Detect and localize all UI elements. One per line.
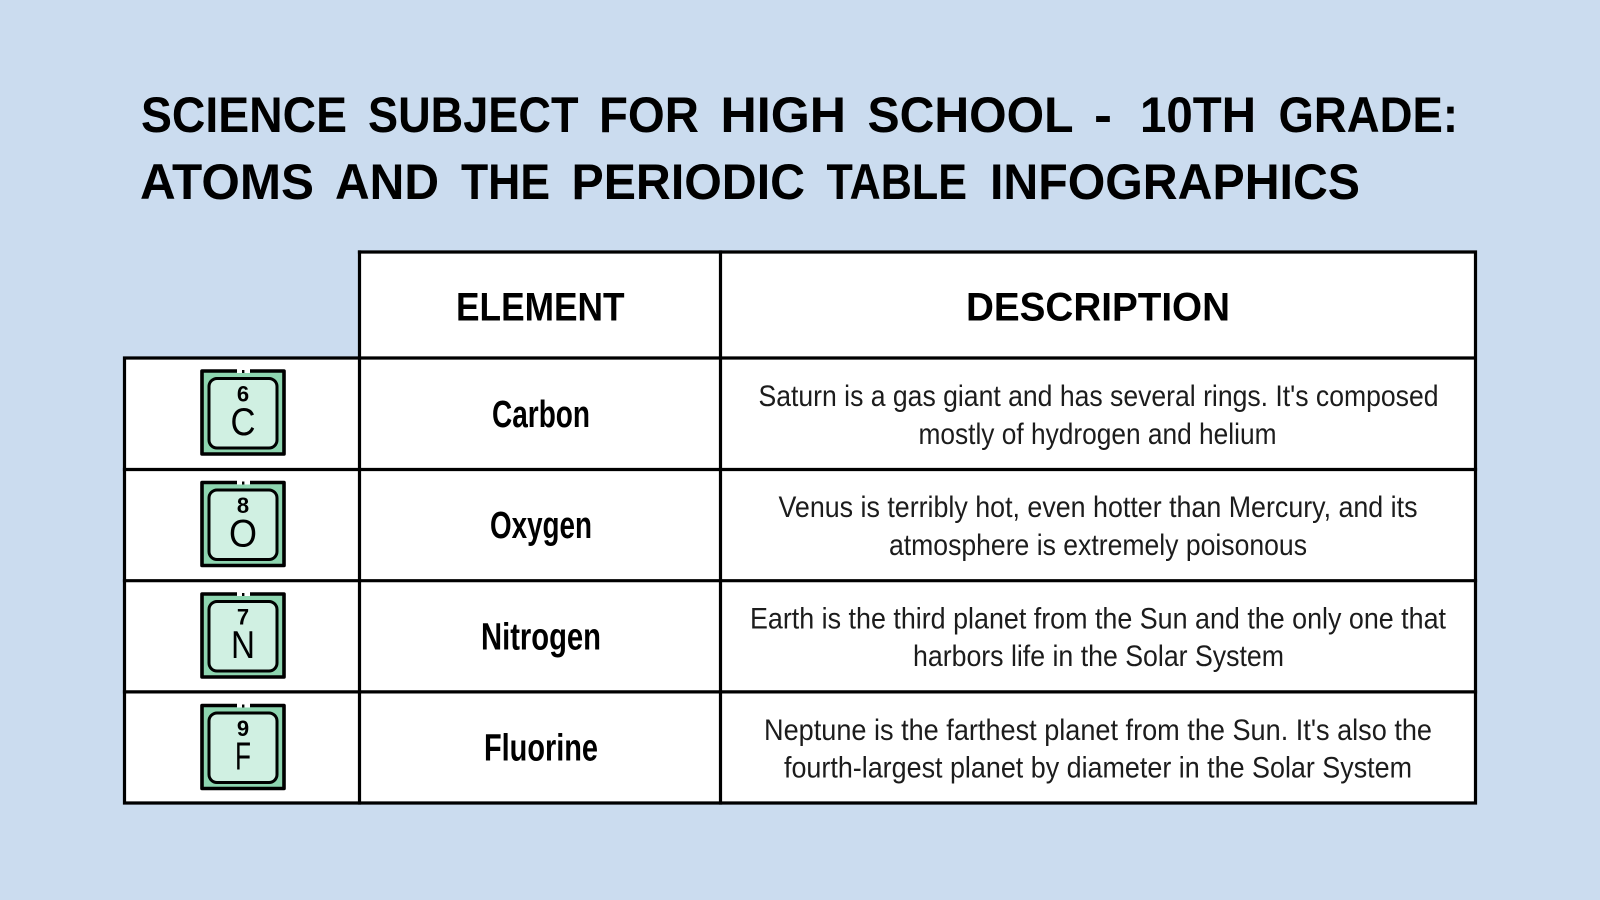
icon: oxygen tile: O bbox=[229, 512, 257, 556]
title: PERIODIC bbox=[572, 154, 805, 210]
title: SCHOOL bbox=[868, 87, 1074, 143]
icon: carbon tile: C bbox=[230, 401, 256, 444]
element name: Nitrogen bbox=[481, 616, 601, 658]
column heading: element: ELEMENT bbox=[456, 286, 624, 330]
title: HIGH bbox=[720, 87, 846, 143]
description text bbox=[750, 602, 1446, 673]
icon: nitrogen tile: N bbox=[231, 624, 255, 667]
icon: nitrogen tile: 7 bbox=[237, 604, 249, 630]
icon: fluorine tile: 9 bbox=[237, 716, 249, 741]
icon: oxygen tile: 8 bbox=[237, 493, 249, 518]
icon: fluorine tile: F bbox=[235, 736, 251, 778]
title: TABLE bbox=[826, 154, 967, 210]
table bbox=[124, 252, 1476, 803]
title: THE bbox=[461, 154, 550, 210]
row: nitrogen bbox=[202, 592, 1446, 677]
title: 10TH bbox=[1140, 87, 1256, 143]
column heading: description: DESCRIPTION bbox=[966, 286, 1230, 330]
table grid bbox=[124, 252, 1476, 803]
element name: Oxygen bbox=[490, 505, 592, 547]
title: AND bbox=[335, 154, 439, 210]
description text: Saturn is a gas giant and has several rings. It's composed bbox=[758, 380, 1438, 413]
description text: fourth-largest planet by diameter in the Solar System bbox=[784, 752, 1412, 784]
description text: Neptune is the farthest planet from the Sun. It's also the bbox=[764, 714, 1432, 747]
title: - bbox=[1094, 87, 1112, 143]
row: carbon bbox=[202, 369, 1438, 454]
title: SUBJECT bbox=[368, 87, 578, 143]
row: oxygen bbox=[202, 480, 1418, 566]
row: fluorine bbox=[202, 704, 1432, 788]
title: ATOMS bbox=[140, 154, 314, 210]
title: SCIENCE bbox=[141, 87, 347, 143]
description text: Earth is the third planet from the Sun and the only one that bbox=[750, 602, 1446, 636]
title: GRADE: bbox=[1278, 87, 1458, 143]
title: INFOGRAPHICS bbox=[990, 154, 1360, 210]
icon: nitrogen tile bbox=[202, 592, 284, 677]
icon: carbon tile: 6 bbox=[237, 382, 249, 406]
description text: Venus is terribly hot, even hotter than Mercury, and its bbox=[778, 491, 1418, 524]
title: FOR bbox=[599, 87, 699, 143]
element name: Fluorine bbox=[484, 728, 598, 770]
icon: carbon tile bbox=[202, 369, 284, 454]
description text bbox=[778, 491, 1418, 562]
icon: fluorine tile bbox=[202, 704, 284, 788]
description text: mostly of hydrogen and helium bbox=[918, 418, 1276, 451]
description text: atmosphere is extremely poisonous bbox=[889, 529, 1307, 562]
description text bbox=[764, 714, 1432, 784]
description text bbox=[758, 380, 1438, 451]
icon: oxygen tile bbox=[202, 480, 284, 566]
element name: Carbon bbox=[492, 394, 590, 436]
description text: harbors life in the Solar System bbox=[913, 640, 1284, 673]
title bbox=[140, 87, 1458, 210]
